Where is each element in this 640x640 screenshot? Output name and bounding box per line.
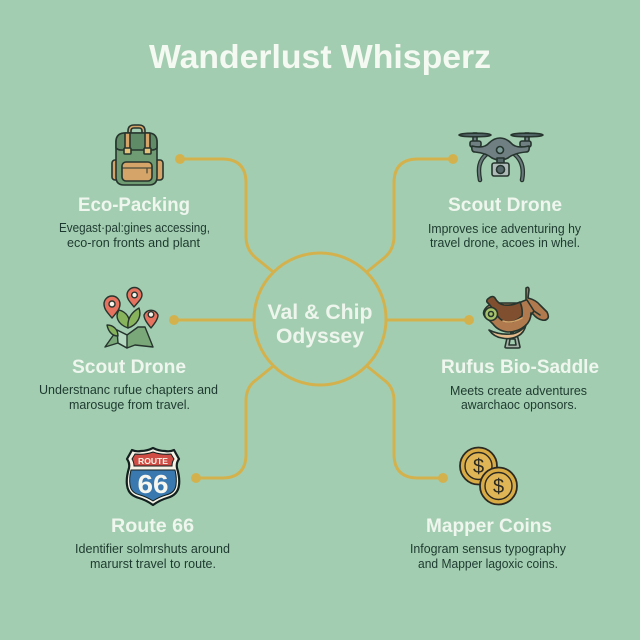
heading: Scout Drone [72,356,186,378]
heading: Rufus Bio-Saddle [441,356,599,378]
description: Improves ice adventuring hy [428,222,582,236]
icon: coins [460,448,517,504]
coin symbol back: $ [473,456,484,478]
icon: backpack [112,125,163,185]
description: Evegast·pal:gines accessing, [59,221,210,235]
connector: to Route 66 [191,367,272,483]
icon: map with pins and leaves [104,288,158,348]
description: Identifier solmrshuts around [75,542,230,556]
panel: Scout Drone (top right) [428,133,582,250]
shield number: 66 [138,469,168,499]
description: travel drone, acoes in whel. [430,236,580,250]
central hub [254,253,386,385]
icon: drone [459,133,543,180]
connector: to Rufus Bio-Saddle [387,315,474,325]
connector: to Mapper Coins [368,367,448,483]
panel: Route 66 [75,448,230,571]
description: marurst travel to route. [90,557,216,571]
hub label: Val & Chip [268,301,372,324]
heading: Eco-Packing [78,194,190,216]
hub label: Odyssey [276,325,364,348]
panel: Scout Drone (left) [39,288,218,412]
panel: Mapper Coins [410,448,567,571]
description: awarchaoc oponsors. [461,398,577,412]
panel: Eco-Packing [59,125,210,250]
connector: to Eco-Packing [175,154,272,271]
shield text: ROUTE: ROUTE [138,457,169,466]
icon: saddle horse [484,287,548,348]
heading: Mapper Coins [426,515,552,537]
connector: to top-right Scout Drone [368,154,458,271]
coin symbol front: $ [493,476,504,498]
description: eco-ron fronts and plant [67,236,201,250]
heading: Scout Drone [448,194,562,216]
description: marosuge from travel. [69,398,190,412]
title: Wanderlust Whisperz [149,38,491,75]
panel: Rufus Bio-Saddle [441,287,599,412]
description: Infogram sensus typography [410,542,567,556]
description: and Mapper lagoxic coins. [418,557,558,571]
connector: to left Scout Drone [169,315,253,325]
description: Understnanc rufue chapters and [39,383,218,397]
icon: route 66 shield [127,448,179,505]
heading: Route 66 [111,515,194,537]
description: Meets create adventures [450,384,587,398]
